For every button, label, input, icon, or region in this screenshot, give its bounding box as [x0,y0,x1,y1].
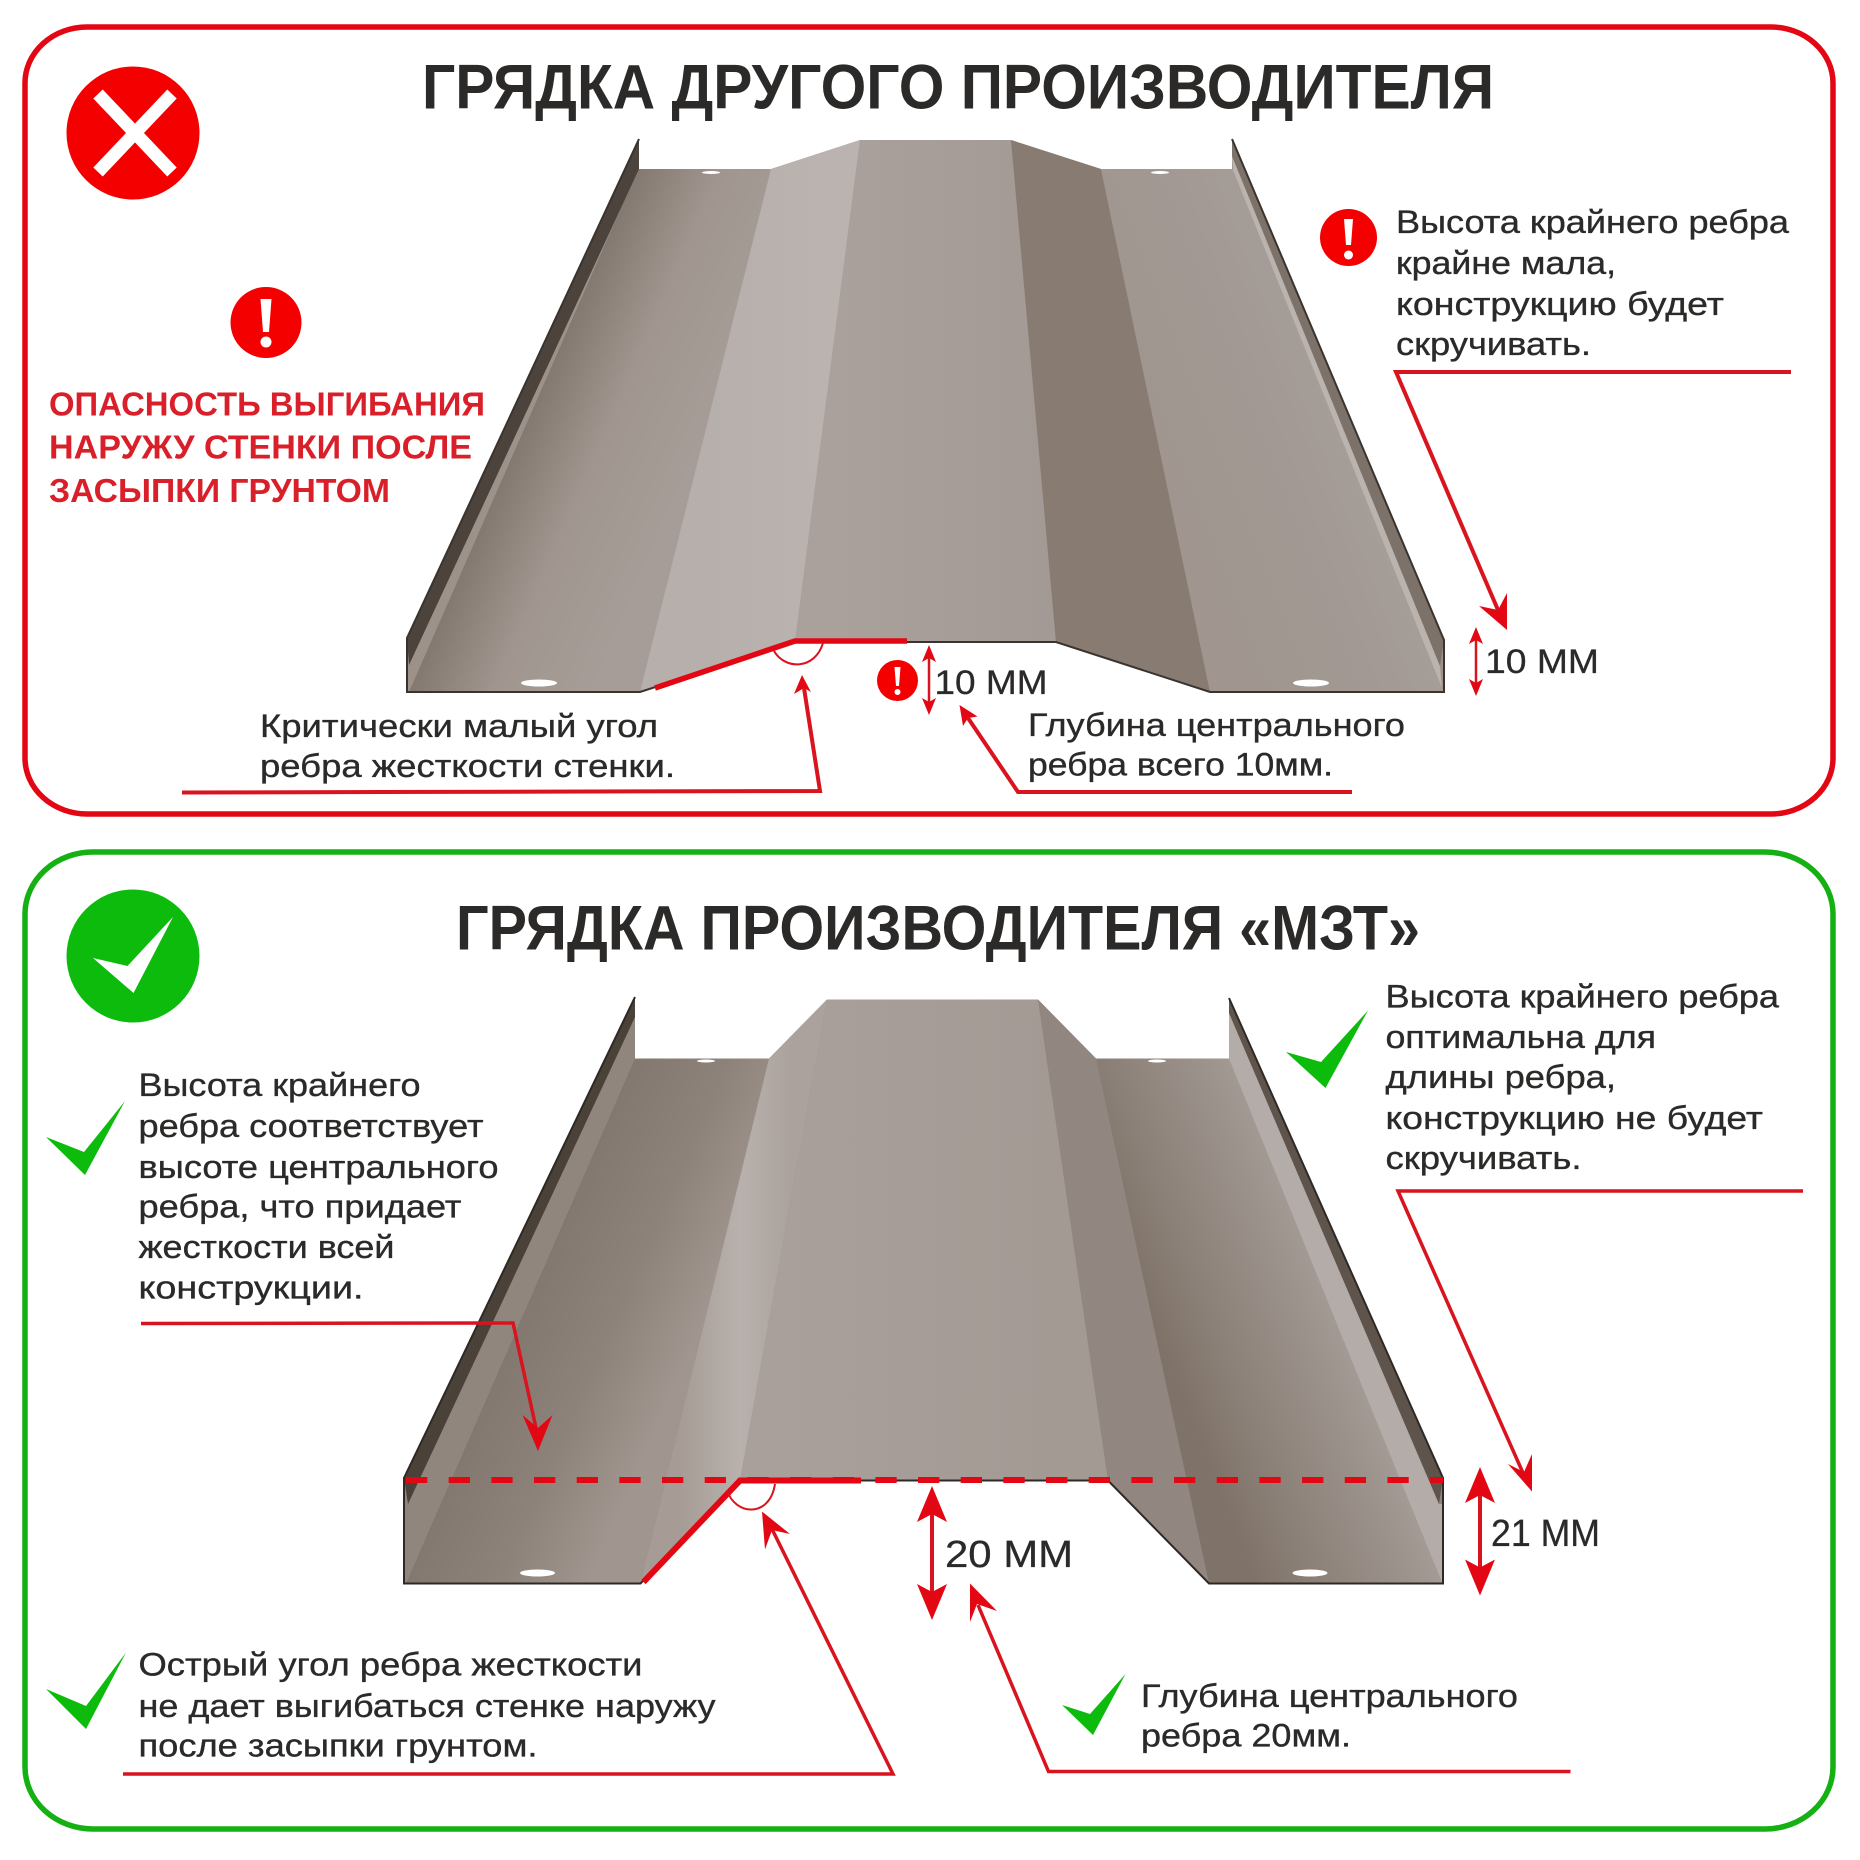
panel: MZT manufacturer [25,852,1833,1829]
title: MZT manufacturer: ГРЯДКА ПРОИЗВОДИТЕЛЯ «МЗТ» [456,894,1420,964]
arrow: right callout [1396,372,1791,630]
text: angle callout: ребра жесткости стенки. [260,748,675,784]
dimension arrow: center 10 mm [922,645,936,715]
text: left callout: жесткости всей [138,1229,394,1265]
text: left callout [138,1067,498,1306]
check: center depth callout [1062,1674,1126,1735]
panel: other manufacturer [25,27,1833,814]
text: right callout: конструкцию будет [1396,286,1724,322]
arrow: angle callout [123,1512,893,1774]
illustration: shallow bed profile [407,139,1444,692]
text: left callout: Высота крайнего [138,1067,420,1103]
arrow: left callout [141,1323,552,1451]
dimension arrow: center 20 mm [917,1486,947,1620]
dimension arrow: right 21 mm [1465,1467,1495,1596]
text: right callout [1386,978,1779,1176]
title: other manufacturer: ГРЯДКА ДРУГОГО ПРОИЗВОДИТЕЛЯ [422,52,1494,122]
text: center depth callout: ребра всего 10мм. [1028,746,1333,782]
icon: warning center [877,660,918,701]
text: right callout: длины ребра, [1386,1059,1616,1095]
highlight: sharp rib angle [644,1480,861,1582]
arrow: angle callout [182,675,820,792]
label: right 10 mm: 10 ММ [1485,643,1599,681]
illustration: deep bed profile [404,997,1443,1584]
text: left callout: ребра, что придает [138,1188,462,1224]
text: right callout: крайне мала, [1396,245,1616,281]
text: red warning: НАРУЖУ СТЕНКИ ПОСЛЕ [49,428,472,466]
text: bottom left callout: не дает выгибаться стенке наружу [138,1688,716,1724]
text: right callout [1396,204,1789,362]
text: red warning: ОПАСНОСТЬ ВЫГИБАНИЯ [49,386,485,422]
text: center depth callout: ребра 20мм. [1141,1718,1351,1754]
text: left callout: высоте центрального [138,1149,498,1185]
text: angle callout [260,708,675,784]
label: center 10 mm: 10 ММ [934,664,1048,702]
text: center depth callout [1141,1678,1518,1754]
text: right callout: конструкцию не будет [1386,1100,1763,1136]
text: bottom left callout: после засыпки грунтом. [138,1728,538,1764]
arrow: right callout [1398,1191,1803,1492]
dimension arrow: right 10 mm [1469,627,1483,696]
text: red warning [49,386,485,509]
text: center depth callout: Глубина центрального [1141,1678,1518,1714]
label: center 20 mm: 20 ММ [945,1534,1073,1576]
icon: warning right [1320,209,1377,266]
text: right callout: скручивать. [1386,1140,1582,1176]
text: center depth callout: Глубина центрального [1028,707,1405,743]
text: right callout: Высота крайнего ребра [1396,204,1789,240]
icon: warning left [230,287,302,358]
icon: green check circle [66,890,200,1022]
text: left callout: конструкции. [138,1270,364,1306]
text: right callout: Высота крайнего ребра [1386,978,1779,1014]
text: right callout: скручивать. [1396,326,1591,362]
text: center depth callout [1028,707,1405,782]
check: right callout [1286,1010,1368,1088]
dashed line: rib height level [406,1477,1443,1483]
text: right callout: оптимальна для [1386,1019,1656,1055]
check: left callout [46,1101,125,1175]
text: bottom left callout [138,1646,716,1764]
text: angle callout: Критически малый угол [260,708,658,744]
text: bottom left callout: Острый угол ребра жесткости [138,1646,642,1682]
text: left callout: ребра соответствует [138,1108,484,1144]
check: bottom left callout [46,1652,126,1729]
arrow: center depth callout [970,1584,1570,1772]
label: right 21 mm: 21 ММ [1491,1513,1600,1555]
text: red warning: ЗАСЫПКИ ГРУНТОМ [49,472,390,509]
arrow: center depth callout [960,705,1352,792]
highlight: small rib angle [655,641,907,688]
icon: red cross circle [66,66,200,200]
